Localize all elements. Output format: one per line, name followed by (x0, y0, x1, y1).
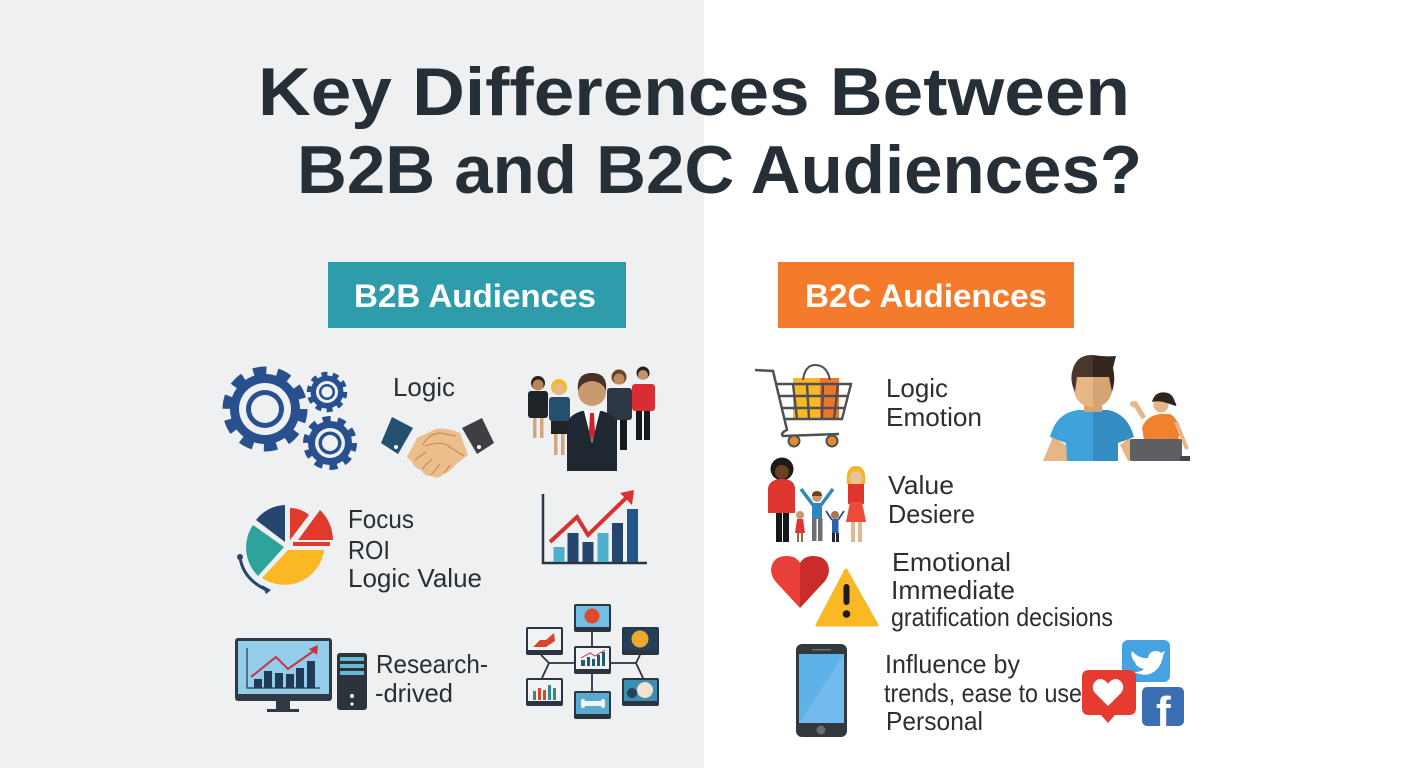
panel: left background (0, 0, 704, 768)
icon: pie chart (237, 505, 333, 594)
text: Value Desiere: Desiere (888, 499, 975, 529)
text: Value Desiere (888, 470, 975, 529)
text: Emotional Immediate gratification decisions: Immediate (891, 575, 1015, 605)
text: Influence by trends, ease to use Personal: Personal (886, 706, 983, 736)
text: Emotional Immediate gratification decisions (891, 547, 1113, 632)
icon: computer tower (337, 653, 367, 710)
text: Focus ROI Logic Value: Focus (348, 504, 414, 534)
icon: facebook badge: f (1156, 688, 1171, 737)
text: Value Desiere: Value (888, 470, 954, 500)
title: B2B and B2C Audiences? (297, 132, 1142, 208)
icon: rising bar chart (543, 490, 647, 563)
title (258, 54, 1142, 208)
text: Logic Emotion (886, 373, 982, 432)
icon: facebook badge (1142, 687, 1184, 737)
heading: B2B Audiences: B2B Audiences (354, 278, 596, 314)
text: Research-driven (375, 649, 488, 708)
text: Influence by trends, ease to use Personal (884, 649, 1082, 736)
text: Focus ROI Logic Value (348, 504, 482, 593)
heading: B2B Audiences (328, 262, 626, 328)
text: Logic: Logic (393, 372, 455, 402)
icon: family (768, 458, 866, 542)
text: Emotional Immediate gratification decisions: Emotional (892, 547, 1011, 577)
text: Logic Emotion: Emotion (886, 402, 982, 432)
panel: right background (704, 0, 1408, 768)
icon: desktop monitor with chart (235, 638, 332, 712)
text: Emotional Immediate gratification decisions: gratification decisions (891, 602, 1113, 632)
icon: warning triangle (817, 570, 877, 625)
text: Focus ROI Logic Value: Logic Value (348, 563, 482, 593)
icon: gears (227, 371, 354, 467)
heading: B2C Audiences (778, 262, 1074, 328)
heading: B2C Audiences: B2C Audiences (805, 278, 1047, 314)
icon: smartphone (796, 644, 847, 737)
icon: shopping cart (755, 365, 851, 446)
icon: device network (526, 604, 659, 719)
text: Influence by trends, ease to use Personal: trends, ease to use (884, 678, 1082, 708)
text: Logic Emotion: Logic (886, 373, 948, 403)
icon: heart (771, 556, 829, 608)
icon: business team (528, 366, 655, 471)
icon: heart speech bubble (1082, 670, 1136, 723)
icon: handshake (381, 417, 494, 478)
text: Research-driven: -drived (375, 678, 453, 708)
text: Research-driven: Research- (376, 649, 488, 679)
icon: twitter badge (1122, 640, 1170, 682)
icon: person with child at laptop (1043, 355, 1190, 461)
text: Focus ROI Logic Value: ROI (348, 535, 390, 565)
text: Influence by trends, ease to use Personal: Influence by (885, 649, 1020, 679)
title: Key Differences Between (258, 54, 1130, 130)
